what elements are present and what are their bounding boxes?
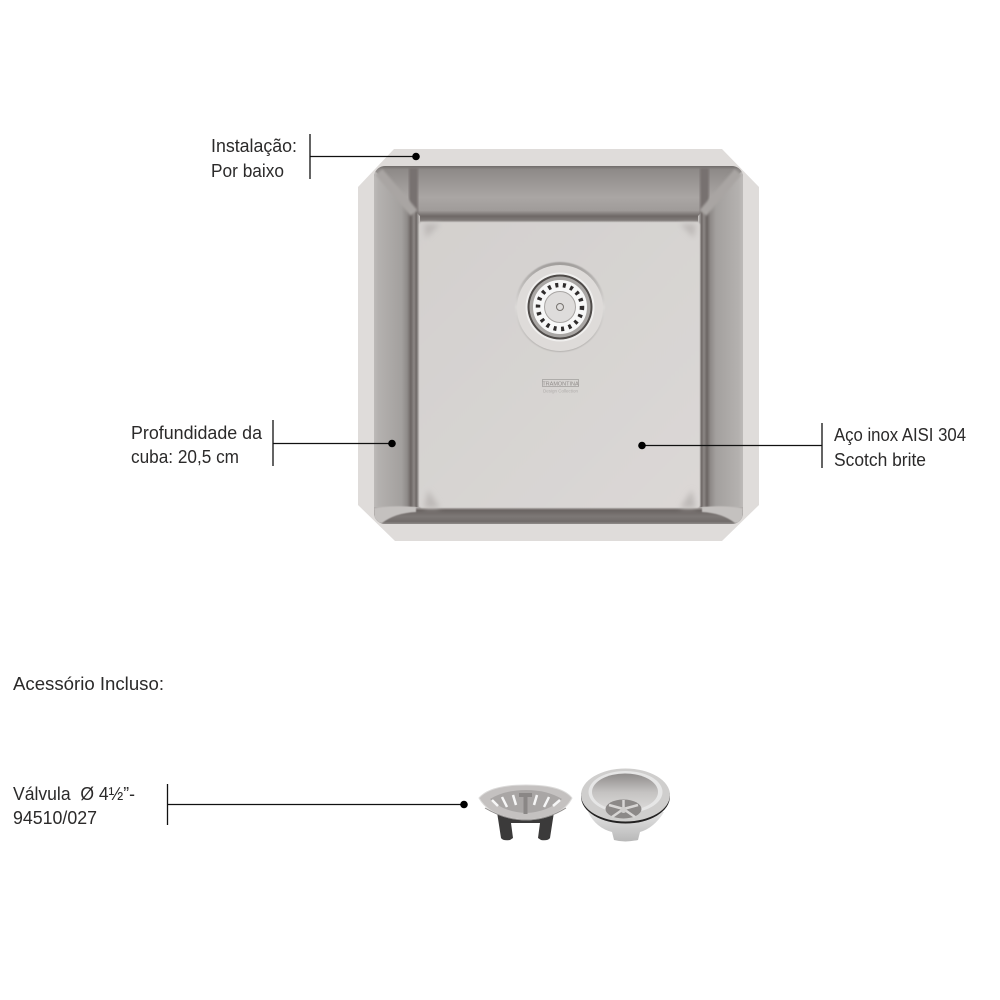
drain [515, 262, 605, 352]
callout: aço inox: Aço inox AISI 304 [834, 425, 966, 445]
sink floor [419, 222, 700, 508]
icon: basket strainer [479, 785, 572, 840]
logo: TRAMONTINA [542, 381, 579, 387]
callout: instalação: Por baixo [211, 161, 284, 181]
sink bowl [374, 166, 743, 524]
callout: aço inox: Scotch brite [834, 450, 926, 470]
callout: aço inox [638, 423, 966, 470]
logo: Design Collection [543, 388, 578, 394]
callout: instalação: Instalação: [211, 136, 297, 156]
callout: instalação [211, 134, 420, 181]
callout: válvula [13, 784, 468, 828]
callout: válvula: 94510/027 [13, 808, 97, 828]
heading: acessório incluso: Acessório Incluso: [13, 674, 164, 694]
icon: drain valve body [581, 768, 670, 842]
sink [358, 149, 759, 541]
callout: profundidade: cuba: 20,5 cm [131, 447, 239, 467]
callout: válvula: Válvula Ø 4½”- [13, 784, 135, 804]
callout: profundidade [131, 420, 396, 467]
sink flange [358, 149, 759, 541]
logo [542, 380, 579, 394]
callout: profundidade: Profundidade da [131, 423, 263, 443]
